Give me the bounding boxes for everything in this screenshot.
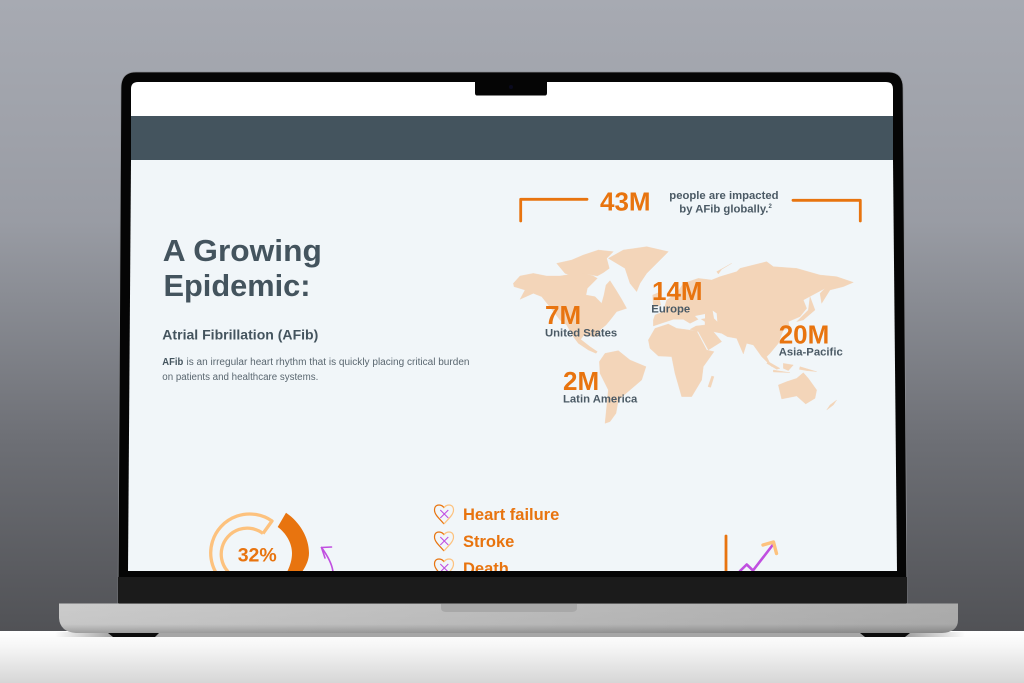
trend line	[740, 546, 772, 571]
dark header band	[131, 116, 893, 160]
death label: Death	[463, 560, 509, 578]
Caspian Sea	[713, 311, 717, 322]
total number: 43M	[600, 187, 651, 217]
map stat: Europe	[652, 282, 701, 315]
donut chart 32%	[209, 512, 309, 571]
United Kingdom	[653, 293, 661, 307]
map stat: United States: United States	[545, 328, 617, 340]
icon: heart stroke, heart failure	[434, 505, 454, 524]
Japan	[797, 297, 815, 322]
map stat: Europe: Europe	[651, 304, 690, 316]
thumb notch	[441, 604, 577, 612]
floor surface	[0, 631, 1024, 683]
Novaya Zemlya	[717, 263, 732, 274]
title: A Growing	[163, 233, 322, 268]
Australia	[778, 373, 817, 404]
laptop base	[59, 604, 958, 633]
description	[162, 357, 470, 383]
total description: by AFib globally.	[679, 204, 768, 216]
total description: people are impacted	[669, 190, 779, 202]
map stat: Latin America: 2M	[563, 366, 599, 396]
Eurasia	[653, 262, 853, 367]
New Zealand	[827, 400, 837, 410]
title	[164, 239, 320, 302]
Madagascar	[708, 376, 714, 387]
right bracket	[793, 200, 860, 221]
subtitle: Atrial Fibrillation (AFib)	[162, 326, 318, 342]
rising trend chart	[726, 536, 776, 575]
icon: heart stroke, death	[434, 559, 454, 578]
orange segment	[278, 513, 309, 572]
purple arrow	[322, 547, 333, 572]
title: Epidemic:	[164, 268, 310, 303]
Arctic islands	[557, 250, 613, 276]
screen white top bar	[131, 82, 893, 116]
map stat: Latin America: Latin America	[563, 394, 638, 406]
laptop lid	[118, 72, 907, 604]
screen content panel	[128, 160, 898, 592]
pale ring	[209, 512, 274, 571]
arrow head	[763, 542, 776, 554]
stroke label: Stroke	[463, 533, 514, 551]
laptop	[59, 72, 958, 637]
risk list	[434, 505, 559, 578]
Indonesia and New Guinea	[767, 362, 817, 373]
map stat: Europe: 14M	[652, 276, 703, 306]
Greenland	[608, 247, 668, 292]
ground shadow under laptop	[55, 632, 965, 637]
Black Sea	[695, 314, 705, 319]
total description: 2	[768, 204, 772, 210]
Old World	[648, 262, 853, 410]
description: is an irregular heart rhythm that is quickly placing critical burden	[186, 357, 470, 368]
map stat: United States	[546, 306, 617, 336]
description: on patients and healthcare systems.	[162, 372, 318, 383]
camera notch	[475, 82, 547, 96]
map stat: Latin America	[564, 372, 638, 402]
lower bezel	[118, 577, 907, 603]
South America	[599, 351, 646, 423]
left foot	[108, 633, 159, 637]
map stat: Asia-Pacific	[779, 325, 842, 356]
right foot	[860, 633, 910, 637]
North America	[513, 273, 627, 353]
map stat: Asia-Pacific: 20M	[779, 319, 829, 349]
heart failure label: Heart failure	[463, 506, 559, 524]
global total callout	[521, 187, 860, 221]
left bracket	[521, 199, 587, 221]
icon: heart stroke, stroke	[434, 532, 454, 551]
base shading	[59, 604, 958, 633]
Africa	[648, 324, 714, 397]
description: AFib	[162, 357, 183, 368]
map stat: Asia-Pacific: Asia-Pacific	[779, 347, 843, 359]
map stat: United States: 7M	[545, 300, 581, 330]
world map	[513, 247, 853, 423]
percentage: 32%	[238, 545, 277, 567]
Americas	[513, 247, 668, 423]
chart axis	[725, 536, 727, 575]
